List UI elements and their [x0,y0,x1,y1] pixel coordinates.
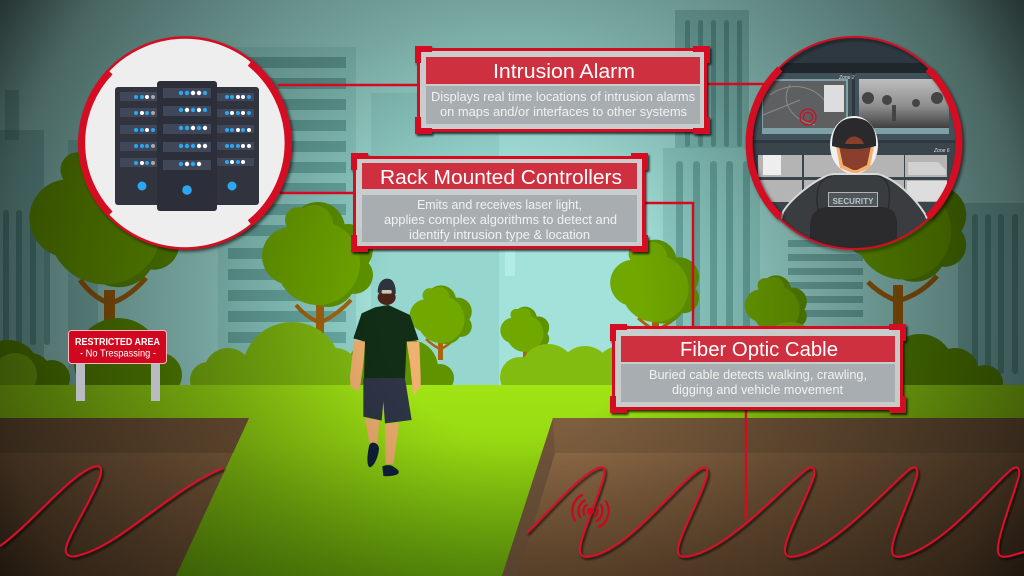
sign: restricted area [68,330,166,401]
heading bar [621,336,895,362]
circle face [80,38,290,248]
description: Emits and receives laser light, [417,197,582,212]
frame [351,153,648,252]
connector lines [278,84,765,520]
body bar [426,86,700,124]
monitoring room scene: Zone 2 [838,75,855,81]
heading: Intrusion Alarm [493,61,635,83]
security guard [780,116,928,248]
description: on maps and/or interfaces to other systems [440,104,687,119]
fiber optic cable, right trench [527,467,1024,557]
body bar [362,195,637,242]
heading: Fiber Optic Cable [680,339,838,361]
frame [610,324,906,413]
icon: server racks [115,81,259,211]
thick ring arcs [82,63,288,223]
description [431,89,695,119]
callout: fiber optic cable [610,324,906,413]
grass [0,385,1024,576]
description: applies complex algorithms to detect and [384,212,617,227]
heading bar [362,163,637,189]
person walking [350,279,421,476]
description: identify intrusion type & location [409,227,590,242]
panel: security monitoring circle [745,35,965,260]
security guard: SECURITY [832,197,874,206]
description: digging and vehicle movement [672,382,843,397]
frame [415,46,710,134]
left trench [0,418,249,576]
trees [29,145,966,385]
fiber optic cable, left trench [0,466,223,557]
monitoring room scene: Zone 6 [933,148,950,154]
description: Displays real time locations of intrusion alarms [431,89,695,104]
description [649,367,867,397]
sign: restricted area: RESTRICTED AREA [75,337,160,348]
sign: restricted area: - No Trespassing - [80,348,156,360]
body bar [621,364,895,402]
buildings [0,10,1024,390]
description [384,197,617,242]
heading bar [426,57,700,84]
description: Buried cable detects walking, crawling, [649,367,867,382]
monitoring room scene [752,38,956,248]
heading: Rack Mounted Controllers [380,167,622,189]
panel: rack controllers circle [80,38,290,248]
icon: vibration signal [569,493,612,529]
ring [748,37,960,249]
callout: rack mounted controllers [351,153,648,252]
callout: intrusion alarm [415,46,710,134]
right trench [502,418,1024,576]
bushes [0,318,1003,422]
